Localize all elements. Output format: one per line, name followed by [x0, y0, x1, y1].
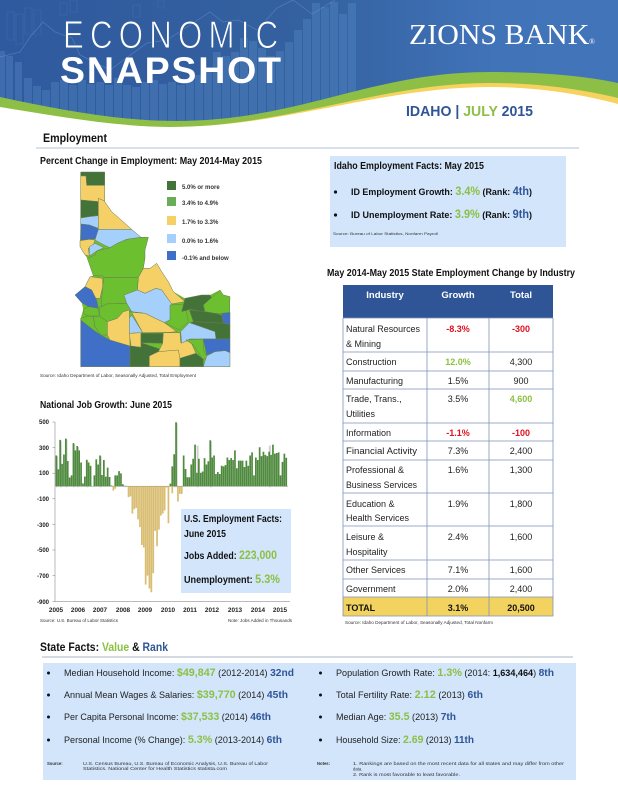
table: employment change by industry: Natural Resources [346, 324, 420, 334]
table: employment change by industry: Trade, Trans., [346, 394, 402, 404]
bar chart: national job growth: 2006 [71, 607, 86, 614]
panel: Idaho employment facts: ID Employment Growth: 3.4% (Rank: 4th) [351, 186, 532, 198]
panel: state facts: Notes: [317, 761, 330, 766]
bar chart: national job growth: -500 [37, 548, 50, 554]
bar chart: national job growth: -900 [37, 600, 50, 606]
table: employment change by industry: 7.3% [448, 446, 468, 456]
panel: state facts [43, 663, 576, 780]
table: employment change by industry: 2.0% [448, 584, 468, 594]
title: snapshot: SNAPSHOT [60, 49, 281, 91]
table: employment change by industry: Education & [346, 499, 395, 509]
callout: U.S. employment facts: Unemployment: 5.3% [184, 572, 280, 586]
table: employment change by industry: Business Services [346, 480, 417, 490]
table: employment change by industry: Utilities [346, 409, 376, 419]
table: employment change by industry: 1,300 [510, 465, 532, 475]
bar chart: national job growth: 100 [39, 471, 50, 477]
table: employment change by industry: 1,800 [510, 499, 532, 509]
bar chart: national job growth: 2009 [138, 607, 153, 614]
callout: U.S. employment facts: U.S. Employment Facts: [184, 514, 282, 525]
table: employment change by industry [343, 285, 553, 616]
bar chart: national job growth: 2012 [205, 607, 220, 614]
table: employment change by industry: Leisure & [346, 532, 384, 542]
bar chart: national job growth: 2008 [116, 607, 131, 614]
table: employment change by industry: -100 [512, 428, 530, 438]
table: employment change by industry: 7.1% [448, 565, 468, 575]
table: employment change by industry: 1.9% [448, 499, 468, 509]
table: employment change by industry: -8.3% [446, 324, 470, 334]
table: employment change by industry: 12.0% [445, 357, 471, 367]
panel: state facts: Source: [47, 761, 63, 766]
callout: U.S. employment facts: Jobs Added: 223,000 [184, 548, 277, 562]
table: employment change by industry: Manufacturing [346, 376, 403, 386]
callout: U.S. employment facts: June 2015 [184, 529, 226, 540]
table: employment change by industry: 20,500 [507, 603, 535, 613]
table: employment change by industry: Professional & [346, 465, 404, 475]
panel: state facts: Per Capita Personal Income: $37,533 (2014) 46th [64, 711, 271, 723]
map legend: 1.7% to 3.3% [182, 220, 219, 226]
heading: state facts: State Facts: Value & Rank [40, 642, 169, 654]
table: employment change by industry: Other Services [346, 565, 406, 575]
table source: Source: Idaho Department of Labor, Seasonally Adjusted, Total Nonfarm [345, 620, 494, 625]
panel: state facts: Statistics. National Center for Health Statistics statista.com [83, 766, 228, 771]
table: employment change by industry: 2,400 [510, 584, 532, 594]
bar chart: national job growth: 2014 [251, 607, 266, 614]
bar chart: national job growth: -300 [37, 523, 50, 529]
heading: national job growth: National Job Growth: June 2015 [40, 399, 172, 411]
panel: state facts: U.S. Census Bureau, U.S. Bureau of Economic Analysis, U.S. Bureau of Labor [83, 761, 269, 766]
panel: Idaho employment facts: Source: Bureau of Labor Statistics, Nonfarm Payroll [333, 232, 438, 236]
bar chart: national job growth: 2007 [93, 607, 108, 614]
state and date: IDAHO | JULY 2015 [406, 103, 533, 120]
bar chart: national job growth [37, 420, 290, 614]
heading: employment: Employment [43, 133, 107, 145]
table: employment change by industry: 1.6% [448, 465, 468, 475]
bar chart: national job growth: 2005 [49, 607, 64, 614]
table: employment change by industry: Total [510, 290, 532, 301]
panel: state facts: Personal Income (% Change): 5.3% (2013-2014) 6th [64, 734, 282, 746]
table: employment change by industry: Hospitality [346, 547, 388, 557]
table: employment change by industry: 2.4% [448, 532, 468, 542]
table: employment change by industry: Industry [366, 290, 404, 301]
bar chart: national job growth: -700 [37, 574, 50, 580]
panel: state facts: 2. Rank is most favorable to least favorable. [353, 772, 460, 777]
table: employment change by industry: Growth [441, 290, 475, 301]
chart source: Source: U.S. Bureau of Labor Statistics [40, 618, 118, 623]
panel: Idaho employment facts: ID Unemployment Rate: 3.9% (Rank: 9th) [351, 209, 532, 221]
table: employment change by industry: -1.1% [446, 428, 470, 438]
map legend: 5.0% or more [182, 185, 220, 191]
panel: state facts: Median Age: 35.5 (2013) 7th [336, 711, 456, 723]
table: employment change by industry: 2,400 [510, 446, 532, 456]
panel: Idaho employment facts: Idaho Employment Facts: May 2015 [334, 161, 484, 172]
panel: state facts: data. [353, 766, 362, 772]
table: employment change by industry: Information [346, 428, 391, 438]
panel: state facts: Annual Mean Wages & Salaries: $39,770 (2014) 45th [64, 689, 288, 701]
table: employment change by industry: 1,600 [510, 565, 532, 575]
table: employment change by industry: 1,600 [510, 532, 532, 542]
bar chart: national job growth: 2011 [183, 607, 197, 614]
panel: state facts: 1. Rankings are based on the most recent data for all states and may differ from other [353, 761, 565, 766]
panel: Idaho employment facts [330, 156, 566, 247]
bar chart: national job growth: 2015 [273, 607, 288, 614]
map legend [167, 181, 229, 262]
panel: state facts: Population Growth Rate: 1.3% (2014: 1,634,464) 8th [336, 667, 554, 679]
table: employment change by industry: 3.5% [448, 394, 468, 404]
heading: map: Percent Change in Employment: May 2014-May 2015 [40, 155, 262, 167]
map legend: 3.4% to 4.9% [182, 201, 219, 207]
table: employment change by industry: 4,600 [510, 394, 532, 404]
logo: zions bank: ZIONS BANK ® [409, 20, 596, 51]
header banner [0, 0, 618, 140]
table: employment change by industry: 3.1% [448, 603, 468, 613]
panel: state facts: Household Size: 2.69 (2013) 11th [336, 734, 474, 746]
table: employment change by industry: & Mining [346, 339, 381, 349]
table: employment change by industry: 4,300 [510, 357, 532, 367]
table: employment change by industry: 1.5% [448, 376, 468, 386]
panel: state facts: Median Household Income: $49,847 (2012-2014) 32nd [64, 667, 294, 679]
title: economic: ECONOMIC [63, 14, 278, 57]
map legend: -0.1% and below [182, 256, 229, 262]
callout: U.S. employment facts [181, 509, 291, 593]
heading: industry table: May 2014-May 2015 State Employment Change by Industry [327, 267, 575, 279]
bar chart: national job growth: 2013 [228, 607, 243, 614]
table: employment change by industry: Government [346, 584, 396, 594]
panel: state facts: Total Fertility Rate: 2.12 (2013) 6th [336, 689, 483, 701]
table: employment change by industry: Construction [346, 357, 397, 367]
bar chart: national job growth: 500 [39, 420, 50, 426]
bar chart: national job growth: 2010 [161, 607, 176, 614]
table: employment change by industry: TOTAL [346, 603, 376, 613]
chart note: Note: Jobs Added in Thousands [228, 618, 292, 623]
map source: Source: Idaho Department of Labor, Seasonally Adjusted, Total Employment [40, 373, 197, 378]
table: employment change by industry: Financial Activity [346, 446, 418, 456]
table: employment change by industry: Health Services [346, 513, 409, 523]
table: employment change by industry: -300 [512, 324, 530, 334]
map: Idaho counties [75, 172, 230, 367]
map legend: 0.0% to 1.6% [182, 239, 219, 245]
bar chart: national job growth: 300 [39, 446, 50, 452]
table: employment change by industry: 900 [513, 376, 529, 386]
bar chart: national job growth: -100 [37, 497, 50, 503]
